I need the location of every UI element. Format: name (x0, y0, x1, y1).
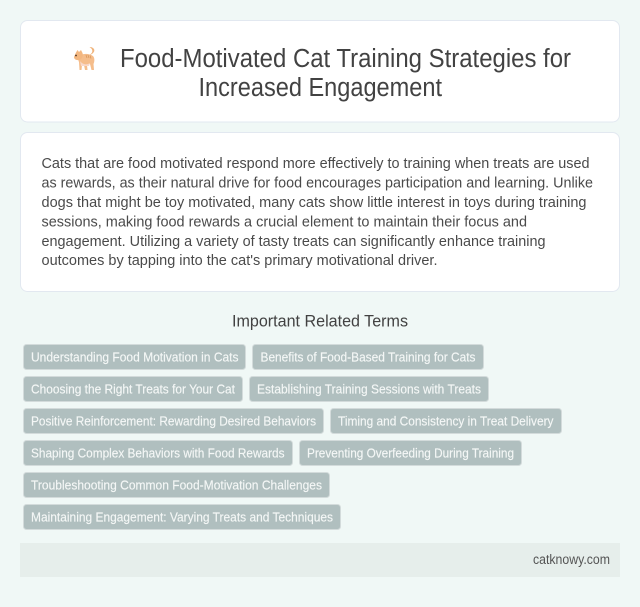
tag: Benefits of Food-Based Training for Cats (260, 350, 476, 364)
text block: description: sessions, making food rewards a crucial element to maintain their focus and (42, 213, 527, 230)
tag (24, 472, 330, 498)
heading: related terms: Important Related Terms (232, 312, 408, 330)
tag: Understanding Food Motivation in Cats (31, 350, 239, 364)
text block: description: Cats that are food motivated respond more effectively to training when treats are used (42, 155, 590, 172)
footer text: catknowy.com (533, 552, 610, 567)
tag (330, 408, 562, 434)
tag (24, 344, 246, 370)
tag: Preventing Overfeeding During Training (307, 446, 514, 460)
tag (250, 376, 488, 402)
tag: Positive Reinforcement: Rewarding Desired Behaviors (31, 414, 316, 428)
title (120, 45, 571, 102)
text block: description: dogs that might be toy motivated, many cats show little interest in toys during training (42, 194, 586, 211)
tag list: related terms (24, 344, 562, 530)
icon: cat (74, 47, 94, 70)
tag: Timing and Consistency in Treat Delivery (338, 414, 554, 428)
title: Increased Engagement (198, 74, 442, 102)
panel: title card (20, 20, 620, 122)
tag (24, 408, 324, 434)
tag (24, 504, 340, 530)
text block: description (42, 155, 593, 269)
text block: description: engagement. Utilizing a variety of tasty treats can significantly enhance training (42, 233, 546, 250)
title: Food-Motivated Cat Training Strategies for (120, 45, 571, 73)
footer (20, 543, 620, 577)
tag: Establishing Training Sessions with Treats (257, 382, 481, 396)
text block: description: outcomes by tapping into the cat's primary motivational driver. (42, 252, 438, 269)
tag: Choosing the Right Treats for Your Cat (31, 382, 235, 396)
tag: Troubleshooting Common Food-Motivation Challenges (31, 478, 322, 492)
text block: description: as rewards, as their natural drive for food encourages participation and learning. Unlike (42, 174, 593, 192)
tag: Maintaining Engagement: Varying Treats and Techniques (31, 510, 333, 524)
tag (300, 440, 522, 466)
tag (24, 440, 292, 466)
tag (24, 376, 242, 402)
panel: description (20, 132, 620, 292)
tag: Shaping Complex Behaviors with Food Rewards (31, 446, 285, 460)
tag (252, 344, 484, 370)
